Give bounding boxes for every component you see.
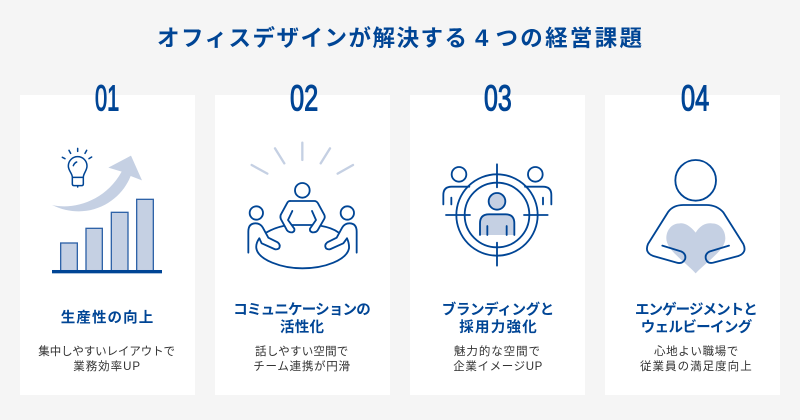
description: 従業員の満足度向上 <box>640 359 752 373</box>
description: 魅力的な空間で <box>454 344 540 358</box>
card background <box>605 95 780 395</box>
heading: 生産性の向上 <box>61 308 153 326</box>
heading: エンゲージメントと <box>635 300 758 318</box>
title: オフィスデザインが解決する <box>157 25 469 51</box>
heading <box>635 300 758 336</box>
panel: productivity <box>20 78 195 395</box>
description <box>253 345 350 373</box>
icon: person hugging heart <box>647 160 745 273</box>
heading <box>233 302 371 336</box>
panel: communication <box>215 78 390 395</box>
panel: engagement <box>605 78 780 395</box>
description <box>640 345 752 373</box>
number 03: 03 <box>484 78 512 118</box>
heading: 活性化 <box>280 319 324 336</box>
card background <box>410 95 585 395</box>
heading: コミュニケーションの <box>233 302 371 318</box>
title: 4 <box>475 25 489 52</box>
heading <box>442 300 554 336</box>
heading: 採用力強化 <box>459 319 537 336</box>
heading: ブランディングと <box>442 300 554 318</box>
heading: ウェルビーイング <box>641 318 753 336</box>
card background <box>215 95 390 395</box>
title: つの経営課題 <box>496 26 644 51</box>
description: チーム連携が円滑 <box>253 359 350 373</box>
card background <box>20 95 195 395</box>
panel: branding <box>410 78 585 395</box>
description: 業務効率UP <box>73 359 140 373</box>
description: 心地よい職場で <box>654 345 738 358</box>
icon: growth chart with light bulb <box>52 148 162 273</box>
number 04: 04 <box>681 78 709 118</box>
description <box>38 344 175 373</box>
number 01: 01 <box>95 78 119 118</box>
description: 集中しやすいレイアウトで <box>38 344 175 358</box>
description: 話しやすい空間で <box>255 345 348 358</box>
icon: person in crosshair target <box>443 164 551 266</box>
icon: people around a table <box>248 143 357 268</box>
number 02: 02 <box>290 78 318 118</box>
description: 企業イメージUP <box>453 359 543 373</box>
description <box>453 344 543 373</box>
